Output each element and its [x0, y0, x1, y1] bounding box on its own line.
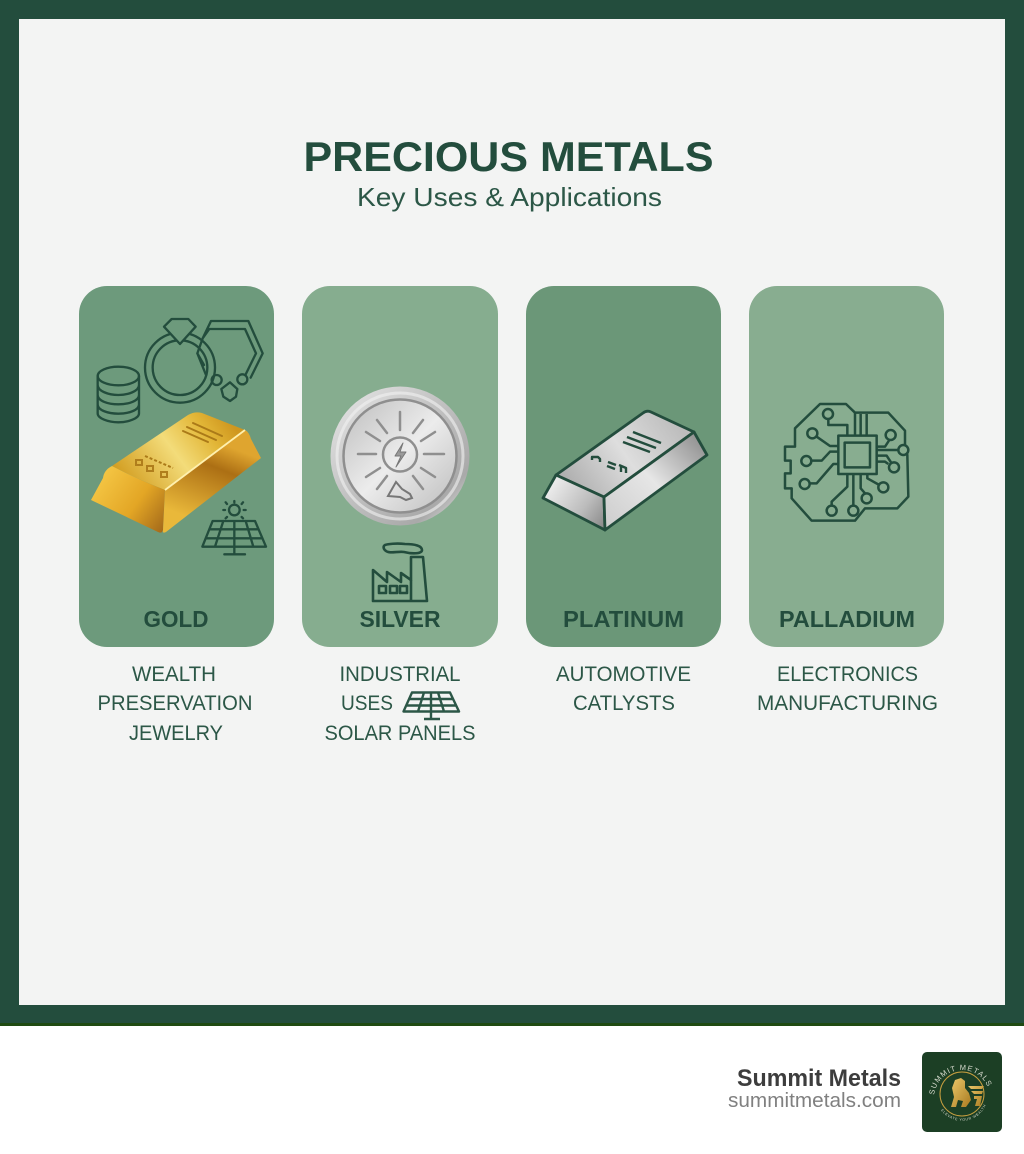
text: platinum uses: [556, 663, 691, 715]
panel: silver: [302, 286, 498, 647]
text: palladium uses: MANUFACTURING: [757, 692, 938, 715]
icon: circuit chip: [785, 404, 908, 521]
silver coin: [330, 386, 470, 526]
text: palladium uses: [757, 663, 938, 715]
icons: jewelry, coins, solar panel: [98, 319, 266, 554]
logo: SUMMIT METALS: [929, 1064, 992, 1094]
label: platinum: PLATINUM: [563, 606, 684, 632]
title: PRECIOUS METALS: [304, 133, 714, 180]
text: palladium uses: ELECTRONICS: [777, 663, 918, 686]
text: silver uses: [324, 663, 476, 745]
footer brand name: Summit Metals: [737, 1065, 901, 1092]
label: silver: SILVER: [360, 606, 441, 632]
platinum bar: [543, 411, 707, 530]
icon: factory: [373, 544, 427, 601]
text: gold uses: WEALTH: [132, 663, 216, 686]
icon: solar panel: [404, 692, 459, 719]
text: silver uses: SOLAR PANELS: [324, 722, 476, 745]
label: gold: GOLD: [144, 606, 208, 632]
gold bar: [91, 412, 261, 533]
text: platinum uses: CATLYSTS: [573, 692, 675, 715]
panel: platinum: [526, 286, 721, 647]
panel: palladium: [749, 286, 944, 647]
logo: ELEVATE YOUR WEALTH: [941, 1104, 986, 1121]
text: gold uses: [98, 663, 252, 745]
logo: [922, 1052, 1002, 1132]
label: palladium: PALLADIUM: [779, 606, 915, 632]
text: gold uses: PRESERVATION: [98, 692, 252, 715]
text: silver uses: INDUSTRIAL: [340, 663, 460, 686]
text: silver uses: USES: [341, 692, 393, 715]
panel: gold: [79, 286, 274, 647]
subtitle: Key Uses & Applications: [357, 182, 662, 212]
text: platinum uses: AUTOMOTIVE: [556, 663, 691, 686]
text: gold uses: JEWELRY: [129, 722, 223, 745]
footer url: summitmetals.com: [728, 1090, 901, 1112]
